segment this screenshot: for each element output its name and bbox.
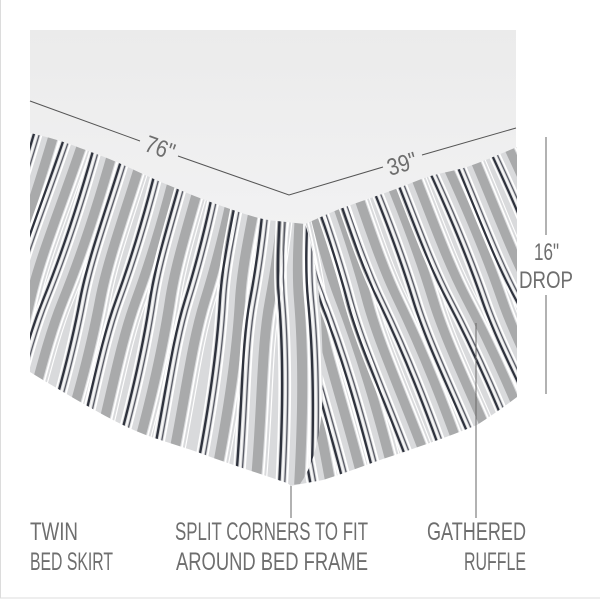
callout line: gathered ruffle — [475, 323, 477, 518]
skirt left side panel with corner pleat — [30, 133, 323, 485]
label: 76 inches: 76" — [141, 131, 179, 166]
label: drop: DROP — [519, 267, 573, 294]
label: 16 inch: 16" — [534, 239, 559, 266]
label: gathered ruffle: GATHERED — [427, 518, 526, 546]
mattress top panel — [30, 30, 516, 235]
label: gathered ruffle: RUFFLE — [464, 548, 526, 576]
skirt right side panel — [290, 147, 517, 486]
label: gathered ruffle — [427, 518, 526, 576]
callout line: split corners — [290, 486, 292, 518]
label: split corners to fit around bed frame: SPLIT CORNERS TO FIT — [175, 518, 368, 546]
drop dimension — [519, 137, 573, 394]
dimension line: 76 inch width — [30, 101, 516, 195]
label: split corners to fit around bed frame: AROUND BED FRAME — [176, 548, 368, 576]
label: 39 inches: 39" — [384, 147, 420, 182]
label: twin bed skirt — [30, 518, 113, 576]
label: twin bed skirt: TWIN — [30, 518, 78, 546]
label: split corners to fit around bed frame — [175, 518, 368, 576]
label: twin bed skirt: BED SKIRT — [30, 548, 113, 576]
